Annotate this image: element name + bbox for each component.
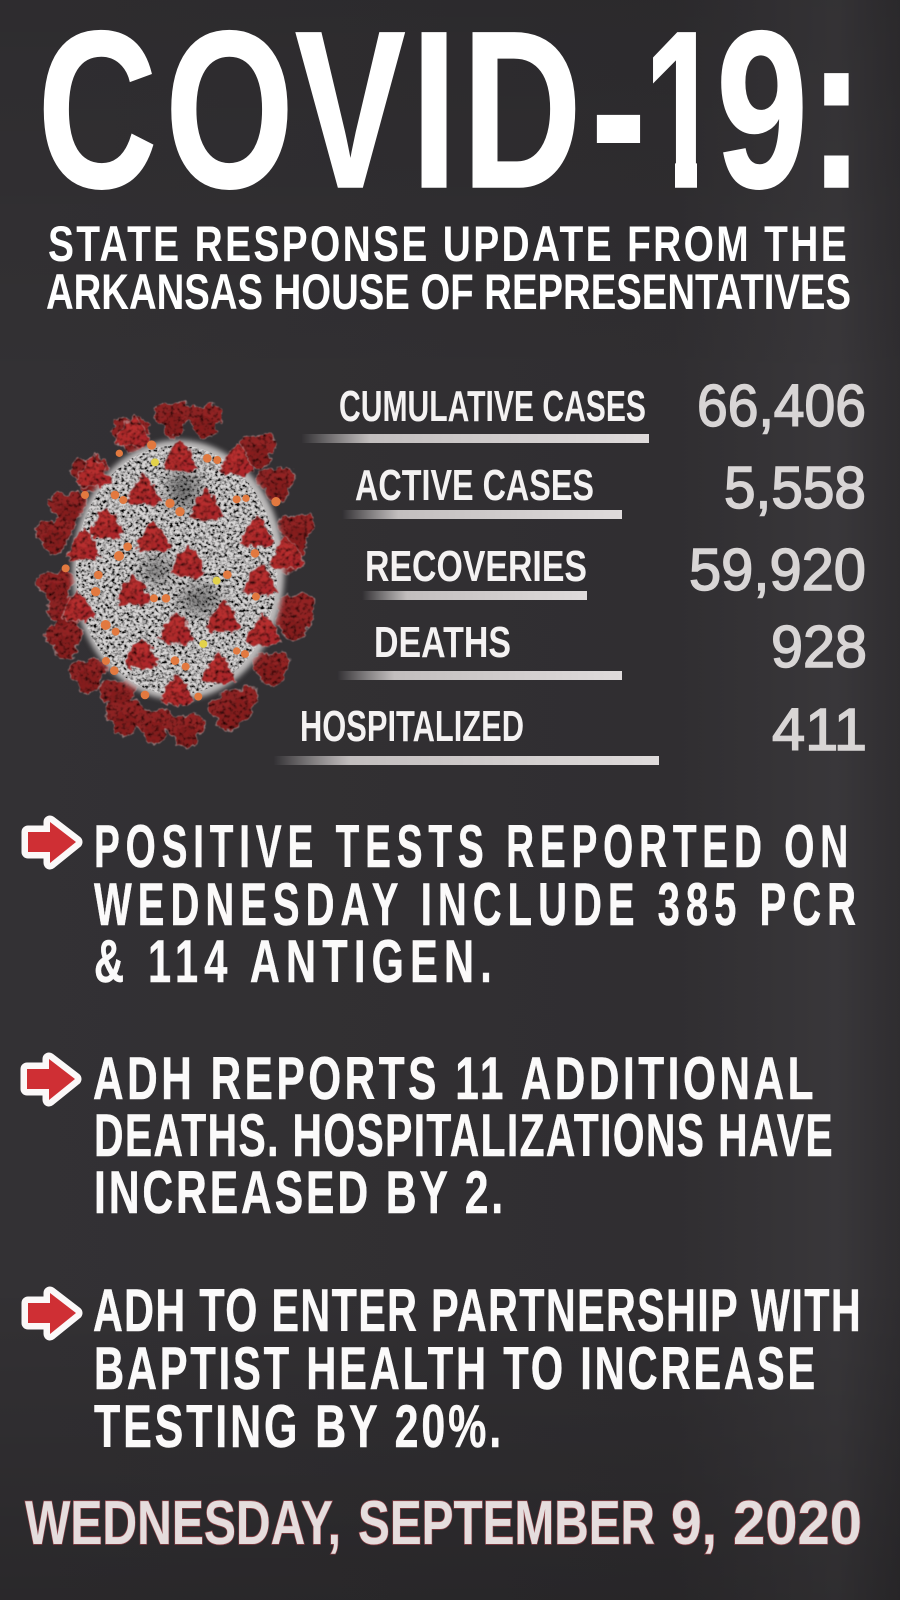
date footer	[25, 1489, 862, 1558]
title	[44, 30, 849, 190]
stat: active cases: 5,558	[724, 455, 866, 521]
bullet: positive tests	[94, 813, 862, 995]
stat: deaths: DEATHS	[374, 618, 511, 667]
stat: recoveries	[362, 537, 866, 603]
stat: cumulative cases	[301, 373, 866, 443]
bullet: deaths and hospitalizations: INCREASED BY 2.	[94, 1159, 506, 1226]
arrow: bullet 3	[28, 1293, 76, 1334]
stat: recoveries: RECOVERIES	[365, 542, 587, 591]
bullet: partnership: TESTING BY 20%.	[94, 1393, 504, 1460]
stat: cumulative cases: 66,406	[697, 373, 866, 439]
stat: recoveries: 59,920	[689, 537, 866, 603]
bullet: partnership	[93, 1277, 862, 1460]
stat: deaths: 928	[771, 614, 867, 680]
arrow: bullet 2	[27, 1059, 75, 1100]
stat: hospitalized	[273, 697, 867, 765]
bullet: deaths and hospitalizations	[93, 1045, 834, 1226]
stat: active cases: ACTIVE CASES	[355, 461, 594, 510]
date footer: SEPTEMBER	[358, 1489, 655, 1558]
date footer: 9,	[671, 1489, 717, 1558]
stat: active cases	[342, 455, 866, 521]
icon: coronavirus illustration	[35, 402, 315, 749]
subtitle	[46, 216, 851, 320]
stat: deaths	[337, 614, 867, 680]
bullet: positive tests: & 114 ANTIGEN.	[94, 928, 498, 995]
date footer: 2020	[733, 1489, 862, 1558]
stat: hospitalized: HOSPITALIZED	[300, 702, 524, 751]
arrow: bullet 1	[28, 822, 76, 863]
stat: cumulative cases: CUMULATIVE CASES	[339, 382, 646, 431]
date footer: WEDNESDAY,	[25, 1489, 341, 1558]
stat: hospitalized: 411	[772, 697, 867, 763]
